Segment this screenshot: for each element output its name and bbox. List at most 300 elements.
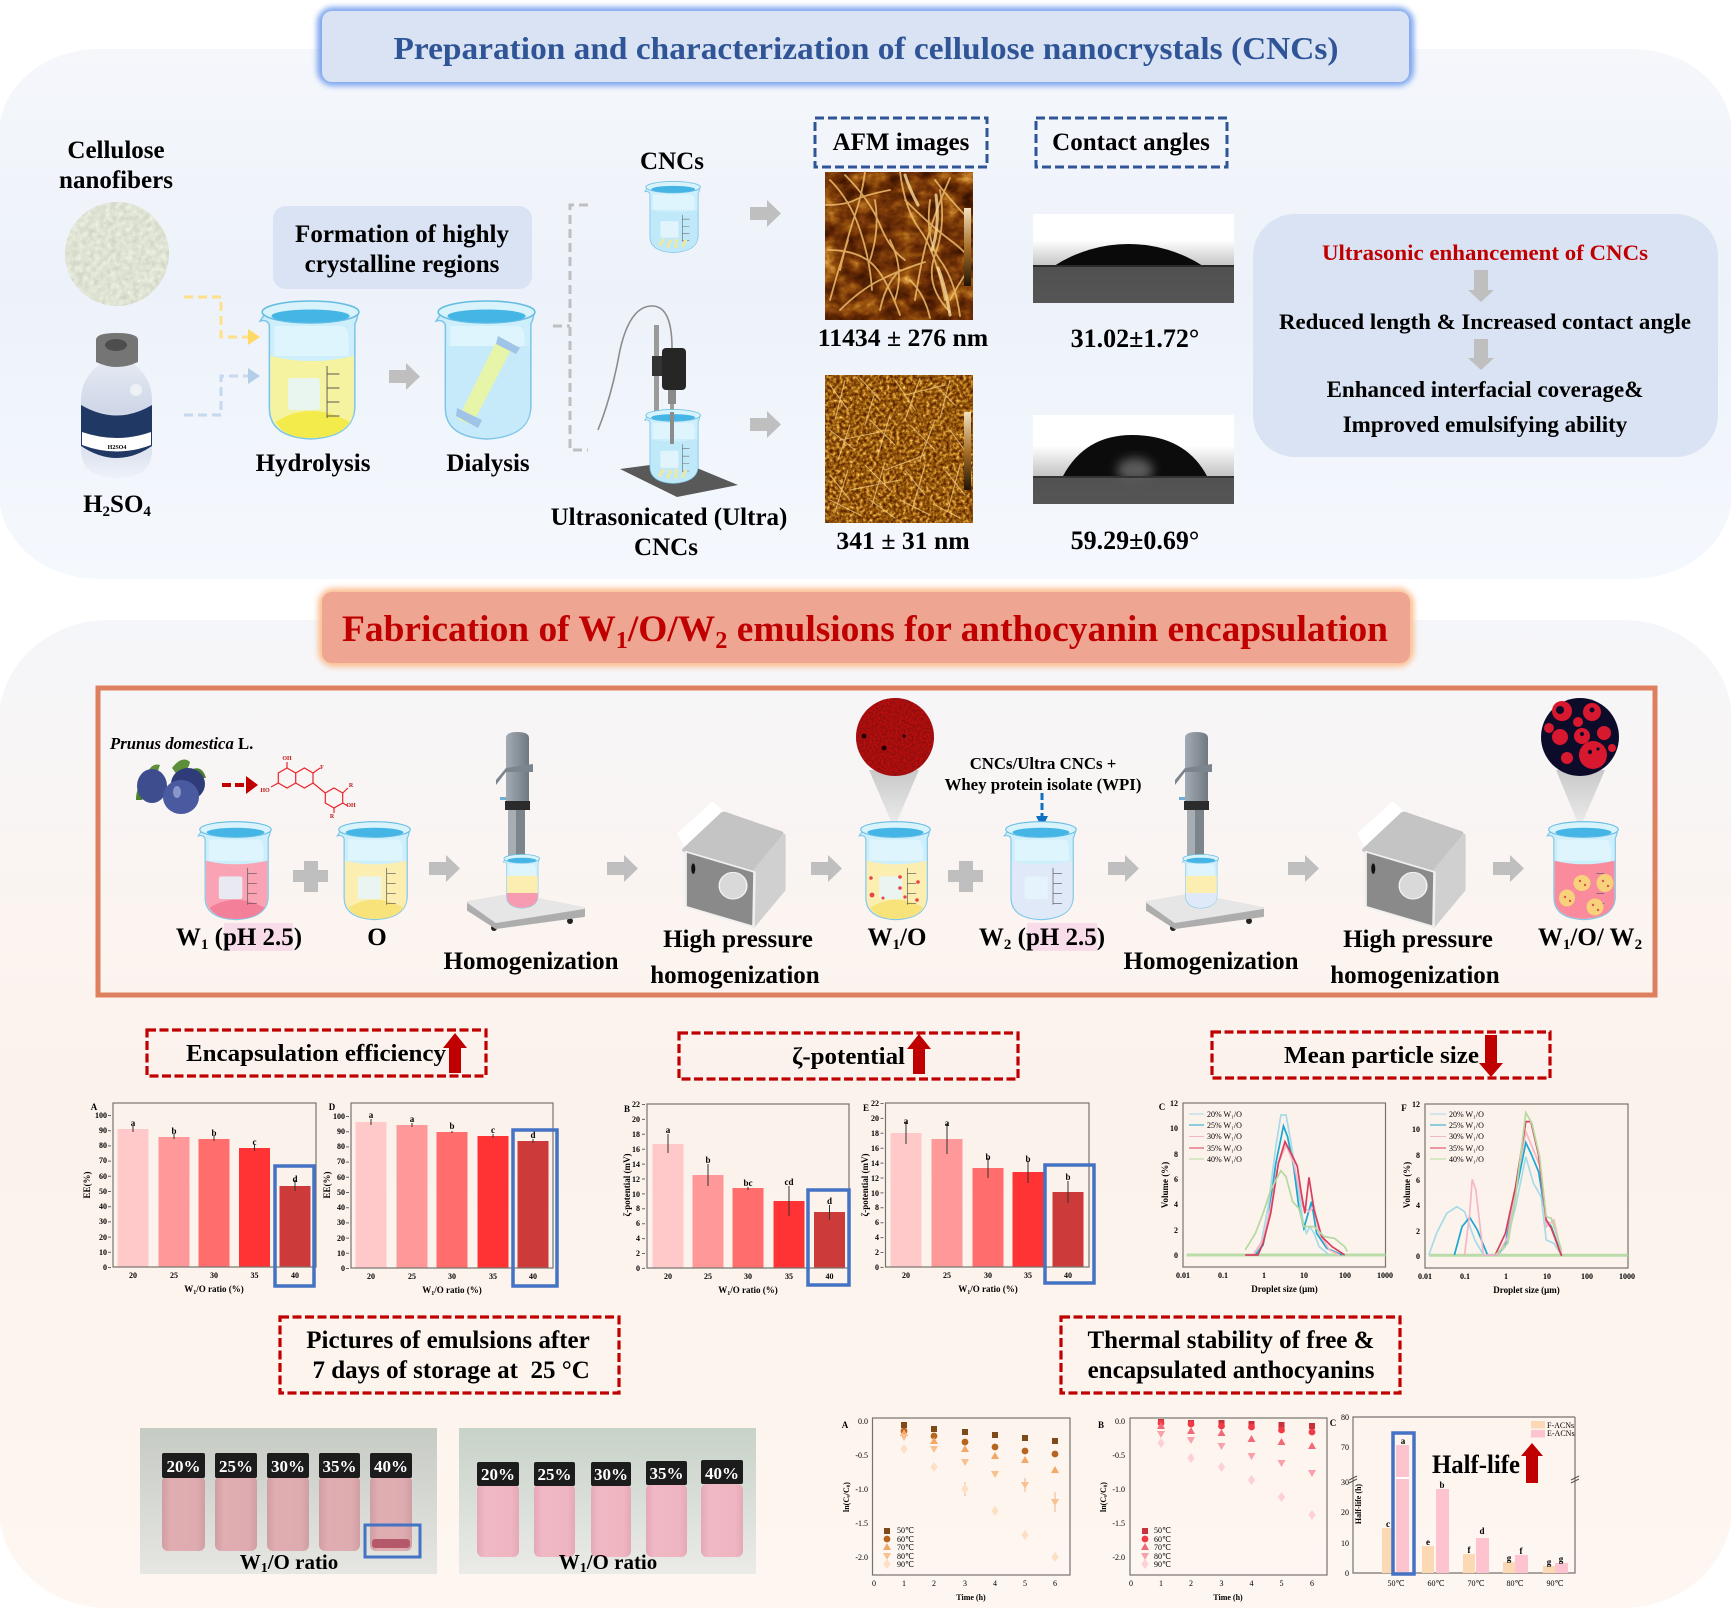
chart: C particle size distribution: 10 bbox=[1300, 1271, 1308, 1280]
photo: emulsion vials without stabilisation: W bbox=[240, 1550, 261, 1574]
chart: C particle size distribution: 0.1 bbox=[1218, 1271, 1228, 1280]
chart: F particle size distribution: 10 bbox=[1412, 1125, 1420, 1134]
chart: D encapsulation efficiency stabilised: 90 bbox=[337, 1127, 345, 1136]
chart: B zeta potential W1/O: 2 bbox=[636, 1249, 640, 1258]
chart: F particle size distribution: 1 bbox=[1504, 1272, 1508, 1281]
arrow: hydrolysis to dialysis bbox=[389, 363, 420, 390]
chart: B zeta potential W1/O: 4 bbox=[636, 1234, 640, 1243]
chart: E zeta potential stabilised: E bbox=[863, 1103, 869, 1113]
highlight: chart D 40 percent bbox=[513, 1130, 557, 1286]
chart: B zeta potential W1/O: 1 bbox=[727, 1291, 730, 1297]
chart: F particle size distribution: 8 bbox=[1416, 1151, 1420, 1160]
chart: E zeta potential stabilised: 16 bbox=[871, 1144, 879, 1153]
chart: B thermal degradation encapsulated anthocyanins: -1.0 bbox=[1112, 1485, 1125, 1494]
chart: B zeta potential W1/O bbox=[622, 1100, 849, 1297]
chart: D encapsulation efficiency stabilised bbox=[322, 1102, 553, 1297]
chart: B zeta potential W1/O: 12 bbox=[632, 1175, 640, 1184]
arrow: WPI into W2 bbox=[1036, 793, 1048, 828]
icon: anthocyanin molecule: OH bbox=[282, 756, 292, 762]
label: H2SO4: 4 bbox=[143, 504, 151, 520]
heading: pictures of emulsions: Pictures of emulsions after bbox=[306, 1327, 590, 1354]
heading: thermal stability: Thermal stability of free & bbox=[1088, 1327, 1374, 1354]
arrow: half-life increase bbox=[1521, 1443, 1543, 1483]
chart: C particle size distribution: 100 bbox=[1339, 1271, 1351, 1280]
image: contact angle CNCs bbox=[1033, 214, 1234, 303]
chart: A thermal degradation free anthocyanins: Time (h) bbox=[956, 1593, 986, 1602]
chart: B zeta potential W1/O: 10 bbox=[632, 1190, 640, 1199]
icon: micrograph W1/O/W2 bbox=[1541, 698, 1619, 821]
chart: F particle size distribution: Volume (%) bbox=[1402, 1162, 1412, 1208]
icon: high pressure homogenizer 2 bbox=[1357, 802, 1464, 927]
icon: anthocyanin molecule: HO bbox=[260, 788, 270, 794]
heading: pictures of emulsions: 7 days of storage at 25 °C bbox=[306, 1357, 590, 1384]
chart: C half-life bars: Half-life (h) bbox=[1354, 1484, 1363, 1524]
photo: emulsion vials without stabilisation: 1 bbox=[261, 1561, 268, 1576]
chart: D encapsulation efficiency stabilised: 1 bbox=[431, 1291, 434, 1297]
chart: D encapsulation efficiency stabilised: c bbox=[491, 1125, 495, 1135]
chart: B zeta potential W1/O: 35 bbox=[785, 1272, 793, 1281]
chart: C half-life bars: f bbox=[1520, 1546, 1524, 1556]
chart: B thermal degradation encapsulated anthocyanins: 90℃ bbox=[1154, 1560, 1171, 1569]
chart: E zeta potential stabilised: 40 bbox=[1064, 1271, 1072, 1280]
photo: emulsion vials without stabilisation: /O ratio bbox=[267, 1550, 338, 1574]
chart: A encapsulation efficiency W1/O: 70 bbox=[99, 1156, 107, 1165]
chart: A thermal degradation free anthocyanins: 2 bbox=[932, 1579, 936, 1588]
chart: E zeta potential stabilised: 20 bbox=[902, 1271, 910, 1280]
title: fabrication of emulsions: emulsions for anthocyanin encapsulation bbox=[727, 609, 1388, 650]
icon: anthocyanin molecule: R bbox=[349, 783, 354, 789]
chart: D encapsulation efficiency stabilised: 30 bbox=[337, 1218, 345, 1227]
arrow: to homogenization 2 bbox=[1108, 855, 1139, 882]
icon: W2 beaker bbox=[1004, 822, 1076, 920]
heading: contact angles: Contact angles bbox=[1052, 129, 1210, 156]
label: ultrasonicated CNCs: CNCs bbox=[634, 534, 698, 561]
heading: zeta potential bbox=[679, 1033, 1018, 1079]
chart: A thermal degradation free anthocyanins: 70℃ bbox=[897, 1543, 914, 1552]
label: CNCs and WPI: Whey protein isolate (WPI) bbox=[945, 775, 1141, 794]
chart: B thermal degradation encapsulated anthocyanins: 6 bbox=[1310, 1579, 1314, 1588]
photo: emulsion vials stabilised bbox=[459, 1428, 756, 1576]
label: CNCs and WPI: CNCs/Ultra CNCs + bbox=[970, 754, 1116, 773]
chart: A thermal degradation free anthocyanins: 80℃ bbox=[897, 1552, 914, 1561]
chart: C half-life bars: 60℃ bbox=[1428, 1579, 1445, 1588]
heading: mean particle size: Mean particle size bbox=[1284, 1043, 1479, 1069]
photo: emulsion vials stabilised: 35% bbox=[650, 1464, 684, 1483]
chart: F particle size distribution: F bbox=[1401, 1103, 1407, 1113]
chart: F particle size distribution bbox=[1401, 1100, 1635, 1295]
chart: B zeta potential W1/O: 16 bbox=[632, 1145, 640, 1154]
chart: E zeta potential stabilised: 0 bbox=[875, 1263, 879, 1272]
label: cellulose nanofibers: Cellulose bbox=[67, 137, 165, 164]
heading: mean particle size bbox=[1212, 1032, 1550, 1078]
icon: homogenizer 1 bbox=[468, 732, 584, 931]
chart: C particle size distribution: Volume (%) bbox=[1160, 1162, 1170, 1208]
chart: B zeta potential W1/O: bc bbox=[744, 1178, 753, 1188]
chart: B thermal degradation encapsulated anthocyanins: ln(C bbox=[1099, 1497, 1108, 1512]
icon: anthocyanin molecule: F bbox=[320, 765, 324, 771]
title: fabrication of emulsions: Fabrication of W bbox=[342, 609, 613, 650]
chart: E zeta potential stabilised: /O ratio (%) bbox=[969, 1284, 1018, 1294]
label: high pressure homogenization 1: High pressure bbox=[663, 926, 813, 953]
chart: D encapsulation efficiency stabilised: 70 bbox=[337, 1157, 345, 1166]
chart: B thermal degradation encapsulated anthocyanins: 0 bbox=[1129, 1579, 1133, 1588]
label: W1 pH 2.5: (pH 2.5) bbox=[208, 924, 302, 951]
heading: encapsulation efficiency: Encapsulation efficiency bbox=[186, 1041, 446, 1067]
title: preparation and characterization bbox=[321, 11, 1410, 82]
title: preparation and characterization: Preparation and characterization of cellulose nanocrystals (CNCs) bbox=[394, 30, 1338, 66]
image: contact angle ultra CNCs bbox=[1033, 415, 1234, 504]
arrow: plum to anthocyanin bbox=[222, 776, 258, 794]
chart: A encapsulation efficiency W1/O: 100 bbox=[95, 1111, 107, 1120]
chart: C particle size distribution: 12 bbox=[1170, 1099, 1178, 1108]
highlight: sedimented layer bbox=[365, 1525, 420, 1557]
panel: ultrasonic enhancement summary: Ultrasonic enhancement of CNCs bbox=[1322, 240, 1648, 265]
chart: E zeta potential stabilised: 22 bbox=[871, 1099, 879, 1108]
chart: B thermal degradation encapsulated anthocyanins: t bbox=[1104, 1495, 1109, 1497]
chart: A encapsulation efficiency W1/O: b bbox=[171, 1126, 177, 1136]
chart: A thermal degradation free anthocyanins bbox=[842, 1417, 1070, 1602]
arrow: blue dashed to hydrolysis bbox=[184, 368, 260, 415]
chart: C half-life bars: F-ACNs bbox=[1547, 1421, 1574, 1430]
chart: D encapsulation efficiency stabilised: /O ratio (%) bbox=[433, 1285, 482, 1295]
chart: A encapsulation efficiency W1/O: 1 bbox=[193, 1290, 196, 1296]
chart: A thermal degradation free anthocyanins: 50℃ bbox=[897, 1526, 914, 1535]
chart: C half-life bars: 30 bbox=[1341, 1478, 1349, 1487]
chart: A encapsulation efficiency W1/O: 20 bbox=[129, 1271, 137, 1280]
chart: E zeta potential stabilised: W bbox=[958, 1284, 967, 1294]
chart: B zeta potential W1/O: 25 bbox=[704, 1272, 712, 1281]
chart: B zeta potential W1/O: 20 bbox=[632, 1115, 640, 1124]
chart: C half-life bars: g bbox=[1507, 1553, 1512, 1563]
photo: emulsion vials stabilised: 25% bbox=[538, 1465, 572, 1484]
chart: F particle size distribution: 100 bbox=[1581, 1272, 1593, 1281]
chart: C half-life bars: 70 bbox=[1341, 1443, 1349, 1452]
label: high pressure homogenization 1: homogenization bbox=[650, 962, 820, 989]
chart: D encapsulation efficiency stabilised: 10 bbox=[337, 1249, 345, 1258]
icon: CNC beaker bbox=[645, 182, 700, 253]
chart: C half-life bars: 0 bbox=[1345, 1569, 1349, 1578]
chart: D encapsulation efficiency stabilised: D bbox=[329, 1102, 336, 1112]
chart: D encapsulation efficiency stabilised: 40 bbox=[337, 1203, 345, 1212]
chart: B thermal degradation encapsulated anthocyanins: 2 bbox=[1189, 1579, 1193, 1588]
chart: E zeta potential stabilised: 25 bbox=[943, 1271, 951, 1280]
chart: B zeta potential W1/O: 30 bbox=[744, 1272, 752, 1281]
label: homogenization 1: Homogenization bbox=[444, 948, 619, 975]
chart: E zeta potential stabilised: b bbox=[1065, 1172, 1071, 1182]
panel: ultrasonic enhancement summary: Improved emulsifying ability bbox=[1343, 412, 1628, 437]
icon: plus bbox=[948, 861, 983, 892]
chart: F particle size distribution: 25% W₁/O bbox=[1449, 1121, 1484, 1130]
chart: F particle size distribution: 35% W₁/O bbox=[1449, 1144, 1484, 1153]
label: W1 pH 2.5: W bbox=[176, 924, 201, 951]
chart: E zeta potential stabilised: 1 bbox=[967, 1290, 970, 1296]
title: fabrication of emulsions bbox=[322, 592, 1410, 663]
bracket: split into CNCs and ultra CNCs bbox=[553, 205, 588, 450]
title: fabrication of emulsions: 1 bbox=[616, 628, 628, 654]
photo: emulsion vials stabilised: W bbox=[559, 1550, 580, 1574]
chart: B thermal degradation encapsulated anthocyanins: 3 bbox=[1220, 1579, 1224, 1588]
chart: B zeta potential W1/O: b bbox=[705, 1155, 711, 1165]
label: contact angle ultra CNCs: 59.29±0.69° bbox=[1071, 526, 1199, 555]
chart: E zeta potential stabilised: 14 bbox=[871, 1159, 879, 1168]
label: W2 pH 2.5: (pH 2.5) bbox=[1011, 924, 1105, 951]
arrow: CNCs to AFM bbox=[750, 200, 781, 227]
chart: C particle size distribution: 20% W₁/O bbox=[1207, 1110, 1242, 1119]
icon: cellulose powder bbox=[65, 202, 169, 306]
panel: ultrasonic enhancement summary: Enhanced interfacial coverage& bbox=[1327, 377, 1643, 402]
label: H2SO4: SO bbox=[110, 491, 143, 518]
heading: pictures of emulsions bbox=[280, 1317, 619, 1393]
chart: A encapsulation efficiency W1/O: 60 bbox=[99, 1172, 107, 1181]
chart: B thermal degradation encapsulated anthocyanins bbox=[1098, 1417, 1327, 1602]
photo: emulsion vials stabilised: 1 bbox=[580, 1561, 587, 1576]
photo: emulsion vials without stabilisation: 30% bbox=[271, 1457, 305, 1476]
chart: E zeta potential stabilised: 6 bbox=[875, 1218, 879, 1227]
chart: B zeta potential W1/O: 14 bbox=[632, 1160, 640, 1169]
label: W1/O/W2: W bbox=[1538, 924, 1563, 951]
chart: A thermal degradation free anthocyanins: 4 bbox=[993, 1579, 997, 1588]
chart: E zeta potential stabilised: 35 bbox=[1024, 1271, 1032, 1280]
label: W1/O: W bbox=[868, 924, 893, 951]
photo: emulsion vials without stabilisation: 35% bbox=[322, 1457, 356, 1476]
label: W1/O/W2: 1 bbox=[1563, 937, 1570, 953]
chart: B zeta potential W1/O: B bbox=[624, 1104, 630, 1114]
label: ultra CNC length: 341 ± 31 nm bbox=[836, 526, 970, 555]
chart: C particle size distribution: 0.01 bbox=[1176, 1271, 1190, 1280]
icon: anthocyanin molecule: OH bbox=[346, 803, 356, 809]
heading: encapsulation efficiency bbox=[147, 1030, 486, 1076]
chart: E zeta potential stabilised: a bbox=[945, 1118, 950, 1128]
icon: plums bbox=[136, 760, 206, 814]
chart: B thermal degradation encapsulated anthocyanins: 70℃ bbox=[1154, 1543, 1171, 1552]
chart: D encapsulation efficiency stabilised: 20 bbox=[367, 1272, 375, 1281]
chart: F particle size distribution: 4 bbox=[1416, 1201, 1420, 1210]
chart: B zeta potential W1/O: a bbox=[666, 1125, 671, 1135]
chart: A thermal degradation free anthocyanins: -2.0 bbox=[855, 1553, 868, 1562]
label: high pressure homogenization 2: High pressure bbox=[1343, 926, 1493, 953]
label: high pressure homogenization 2: homogenization bbox=[1330, 962, 1500, 989]
chart: A encapsulation efficiency W1/O: 30 bbox=[99, 1217, 107, 1226]
chart: C half-life bars: 90℃ bbox=[1547, 1579, 1564, 1588]
chart: D encapsulation efficiency stabilised: b bbox=[449, 1121, 455, 1131]
chart: A thermal degradation free anthocyanins: ln(C bbox=[842, 1497, 851, 1512]
chart: D encapsulation efficiency stabilised: 30 bbox=[448, 1272, 456, 1281]
icon: homogenizer 2 bbox=[1147, 732, 1263, 931]
icon: ultrasonicator bbox=[598, 306, 738, 497]
chart: C particle size distribution: 1000 bbox=[1377, 1271, 1393, 1280]
arrow: ultra CNCs to AFM bbox=[750, 411, 781, 438]
chart: B zeta potential W1/O: W bbox=[718, 1285, 727, 1295]
chart: F particle size distribution: 0.01 bbox=[1418, 1272, 1432, 1281]
chart: B thermal degradation encapsulated anthocyanins: 50℃ bbox=[1154, 1526, 1171, 1535]
photo: emulsion vials without stabilisation bbox=[140, 1428, 437, 1576]
photo: emulsion vials stabilised: 20% bbox=[481, 1465, 515, 1484]
chart: B thermal degradation encapsulated anthocyanins: -1.5 bbox=[1112, 1519, 1125, 1528]
chart: E zeta potential stabilised: a bbox=[904, 1116, 909, 1126]
chart: C half-life bars: g bbox=[1547, 1557, 1552, 1567]
chart: E zeta potential stabilised: 20 bbox=[871, 1114, 879, 1123]
chart: B zeta potential W1/O: ζ-potential (mV) bbox=[622, 1154, 632, 1216]
label: dialysis: Dialysis bbox=[446, 450, 530, 477]
chart: B thermal degradation encapsulated anthocyanins: Time (h) bbox=[1213, 1593, 1243, 1602]
chart: C particle size distribution: 25% W₁/O bbox=[1207, 1121, 1242, 1130]
label: Prunus domestica: Prunus domestica L. bbox=[109, 734, 253, 753]
chart: E zeta potential stabilised: b bbox=[985, 1152, 991, 1162]
chart: B zeta potential W1/O: /O ratio (%) bbox=[729, 1285, 778, 1295]
icon: W1 beaker bbox=[198, 822, 271, 920]
chart: F particle size distribution: 0.1 bbox=[1460, 1272, 1470, 1281]
chart: A encapsulation efficiency W1/O: 40 bbox=[291, 1271, 299, 1280]
chart: B thermal degradation encapsulated anthocyanins: 5 bbox=[1280, 1579, 1284, 1588]
callout: formation of highly crystalline regions: Formation of highly bbox=[295, 221, 509, 248]
icon: micrograph W1/O bbox=[856, 698, 934, 821]
chart: A thermal degradation free anthocyanins: -0.5 bbox=[855, 1451, 868, 1460]
chart: A encapsulation efficiency W1/O: 20 bbox=[99, 1233, 107, 1242]
chart: A thermal degradation free anthocyanins: -1.5 bbox=[855, 1519, 868, 1528]
chart: C half-life bars: e bbox=[1426, 1537, 1430, 1547]
chart: C particle size distribution: C bbox=[1159, 1102, 1165, 1112]
chart: A encapsulation efficiency W1/O: 90 bbox=[99, 1126, 107, 1135]
label: W1/O: 1 bbox=[893, 937, 900, 953]
chart: A thermal degradation free anthocyanins: 1 bbox=[902, 1579, 906, 1588]
icon: plus bbox=[293, 861, 328, 892]
chart: B thermal degradation encapsulated anthocyanins: 0 bbox=[1104, 1484, 1109, 1487]
chart: B zeta potential W1/O: 8 bbox=[636, 1204, 640, 1213]
chart: E zeta potential stabilised: b bbox=[1025, 1154, 1031, 1164]
label: contact angle CNCs: 31.02±1.72° bbox=[1071, 324, 1199, 353]
chart: B zeta potential W1/O: cd bbox=[784, 1177, 794, 1187]
chart: D encapsulation efficiency stabilised: 100 bbox=[333, 1112, 345, 1121]
photo: emulsion vials stabilised: /O ratio bbox=[586, 1550, 657, 1574]
heading: thermal stability bbox=[1061, 1317, 1400, 1393]
chart: B thermal degradation encapsulated anthocyanins: ) bbox=[1099, 1482, 1108, 1485]
chart: B zeta potential W1/O: 20 bbox=[664, 1272, 672, 1281]
chart: A encapsulation efficiency W1/O: 30 bbox=[210, 1271, 218, 1280]
chart: F particle size distribution: 0 bbox=[1416, 1252, 1420, 1261]
chart: C particle size distribution: Droplet size (μm) bbox=[1251, 1284, 1318, 1294]
chart: A encapsulation efficiency W1/O: 0 bbox=[103, 1263, 107, 1272]
icon: H2SO4 bottle: H2SO4 bbox=[108, 445, 126, 451]
callout: formation of highly crystalline regions: crystalline regions bbox=[305, 251, 500, 278]
chart: A encapsulation efficiency W1/O: a bbox=[131, 1118, 136, 1128]
chart: D encapsulation efficiency stabilised: 50 bbox=[337, 1188, 345, 1197]
icon: hydrolysis beaker bbox=[260, 301, 359, 439]
icon: W1/O/W2 beaker bbox=[1547, 822, 1618, 920]
chart: C particle size distribution: 1 bbox=[1262, 1271, 1266, 1280]
chart: B thermal degradation encapsulated anthocyanins: 60℃ bbox=[1154, 1535, 1171, 1544]
chart: E zeta potential stabilised: 10 bbox=[871, 1189, 879, 1198]
chart: A thermal degradation free anthocyanins: /C bbox=[842, 1487, 851, 1496]
label: homogenization 2: Homogenization bbox=[1124, 948, 1299, 975]
chart: C half-life bars: c bbox=[1386, 1519, 1390, 1529]
label: W2 pH 2.5: 2 bbox=[1004, 937, 1011, 953]
chart: B thermal degradation encapsulated anthocyanins: 0.0 bbox=[1115, 1417, 1125, 1426]
chart: C half-life bars bbox=[1330, 1413, 1579, 1588]
chart: F particle size distribution: Droplet size (μm) bbox=[1493, 1285, 1560, 1295]
chart: C particle size distribution bbox=[1159, 1099, 1393, 1294]
callout: formation of highly crystalline regions bbox=[273, 206, 532, 289]
label: half-life: Half-life bbox=[1432, 1450, 1520, 1479]
chart: B thermal degradation encapsulated anthocyanins: /C bbox=[1099, 1487, 1108, 1496]
icon: high pressure homogenizer 1 bbox=[677, 802, 784, 927]
chart: A encapsulation efficiency W1/O: W bbox=[184, 1284, 193, 1294]
chart: B zeta potential W1/O: 40 bbox=[826, 1272, 834, 1281]
chart: E zeta potential stabilised: 8 bbox=[875, 1203, 879, 1212]
panel: CNC preparation background bbox=[0, 49, 1731, 579]
title: fabrication of emulsions: 2 bbox=[715, 628, 727, 654]
icon: oil beaker bbox=[337, 822, 410, 920]
label: hydrolysis: Hydrolysis bbox=[256, 450, 371, 477]
chart: B zeta potential W1/O: 0 bbox=[636, 1264, 640, 1273]
chart: D encapsulation efficiency stabilised: a bbox=[410, 1114, 415, 1124]
label: W1/O/W2: 2 bbox=[1635, 937, 1642, 953]
highlight: pH of W2 bbox=[1027, 923, 1097, 951]
chart: C half-life bars: 80 bbox=[1341, 1413, 1349, 1422]
chart: C half-life bars: d bbox=[1479, 1526, 1485, 1536]
chart: A thermal degradation free anthocyanins: 6 bbox=[1053, 1579, 1057, 1588]
chart: A thermal degradation free anthocyanins: 0 bbox=[847, 1484, 852, 1487]
chart: E zeta potential stabilised: 30 bbox=[984, 1271, 992, 1280]
image: AFM of CNCs bbox=[825, 172, 973, 320]
label: ultrasonicated CNCs: Ultrasonicated (Ultra) bbox=[551, 504, 787, 531]
chart: A encapsulation efficiency W1/O: d bbox=[292, 1174, 298, 1184]
arrow: to W1/O bbox=[811, 855, 842, 882]
panel: ultrasonic enhancement summary bbox=[1253, 214, 1718, 457]
chart: B thermal degradation encapsulated anthocyanins: B bbox=[1098, 1420, 1104, 1430]
highlight: half-life 50 degree bar bbox=[1393, 1433, 1414, 1574]
chart: A encapsulation efficiency W1/O: /O ratio (%) bbox=[195, 1284, 244, 1294]
chart: F particle size distribution: 1000 bbox=[1619, 1272, 1635, 1281]
arrow: yellow dashed to hydrolysis bbox=[184, 297, 260, 345]
label: W1 pH 2.5: 1 bbox=[201, 937, 208, 953]
photo: emulsion vials stabilised: 30% bbox=[594, 1465, 628, 1484]
photo: emulsion vials without stabilisation: 20% bbox=[166, 1457, 200, 1476]
chart: B thermal degradation encapsulated anthocyanins: -0.5 bbox=[1112, 1451, 1125, 1460]
photo: emulsion vials without stabilisation: 25% bbox=[219, 1457, 253, 1476]
icon: anthocyanin molecule: R bbox=[330, 814, 335, 820]
chart: C half-life bars: 20 bbox=[1341, 1508, 1349, 1517]
label: cellulose nanofibers: nanofibers bbox=[59, 167, 173, 194]
chart: D encapsulation efficiency stabilised: 35 bbox=[489, 1272, 497, 1281]
chart: C particle size distribution: 2 bbox=[1174, 1226, 1178, 1235]
chart: C half-life bars: a bbox=[1401, 1436, 1406, 1446]
chart: C particle size distribution: 35% W₁/O bbox=[1207, 1144, 1242, 1153]
label: oil: O bbox=[367, 924, 387, 951]
highlight: chart A 40 percent bbox=[275, 1166, 314, 1286]
chart: B thermal degradation encapsulated anthocyanins: 4 bbox=[1250, 1579, 1254, 1588]
chart: A thermal degradation free anthocyanins: 0.0 bbox=[858, 1417, 868, 1426]
chart: C particle size distribution: 0 bbox=[1174, 1251, 1178, 1260]
chart: F particle size distribution: 40% W₁/O bbox=[1449, 1155, 1484, 1164]
chart: B zeta potential W1/O: 22 bbox=[632, 1100, 640, 1109]
label: H2SO4: 2 bbox=[103, 504, 110, 520]
chart: A thermal degradation free anthocyanins: 60℃ bbox=[897, 1535, 914, 1544]
icon: dialysis beaker bbox=[436, 301, 535, 439]
chart: A encapsulation efficiency W1/O: 40 bbox=[99, 1202, 107, 1211]
chart: D encapsulation efficiency stabilised: 0 bbox=[341, 1264, 345, 1273]
photo: emulsion vials stabilised: 40% bbox=[705, 1464, 739, 1483]
chart: A encapsulation efficiency W1/O: A bbox=[91, 1102, 98, 1112]
chart: C particle size distribution: 40% W₁/O bbox=[1207, 1155, 1242, 1164]
label: W2 pH 2.5: W bbox=[979, 924, 1004, 951]
chart: C particle size distribution: 30% W₁/O bbox=[1207, 1132, 1242, 1141]
chart: A encapsulation efficiency W1/O: b bbox=[211, 1128, 217, 1138]
chart: F particle size distribution: 30% W₁/O bbox=[1449, 1132, 1484, 1141]
chart: D encapsulation efficiency stabilised: 25 bbox=[408, 1272, 416, 1281]
chart: D encapsulation efficiency stabilised: 80 bbox=[337, 1142, 345, 1151]
heading: AFM images: AFM images bbox=[833, 129, 970, 156]
label: W1/O/W2: /O/ W bbox=[1569, 924, 1635, 951]
